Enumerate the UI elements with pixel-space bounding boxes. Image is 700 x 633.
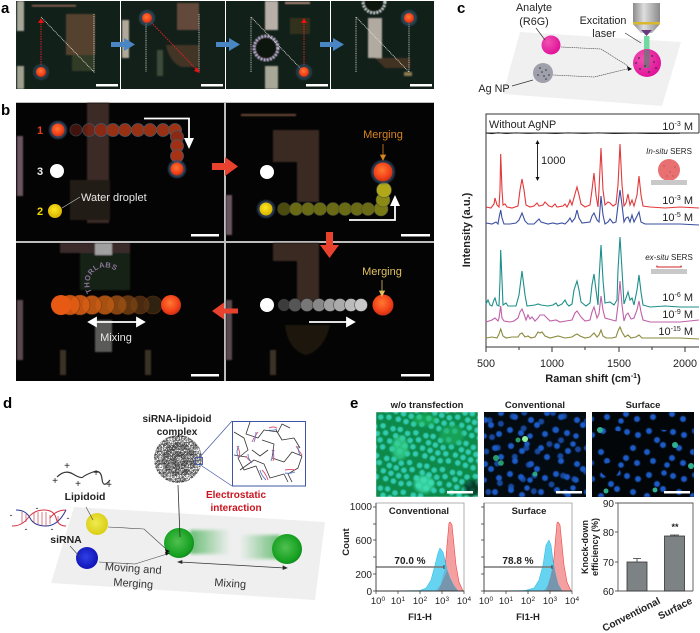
significance: ** <box>671 522 679 532</box>
percent: 78.8 % <box>502 556 534 567</box>
red population <box>544 522 571 591</box>
histogram axes labels: 10 <box>499 596 509 607</box>
y axis title: Intensity (a.u.) <box>461 192 473 267</box>
concentration labels: 10 <box>658 326 671 338</box>
frame 3 <box>226 1 330 89</box>
histogram axes labels: 1000 <box>350 502 372 513</box>
title: Surface <box>512 506 546 517</box>
chart frame <box>486 114 699 352</box>
panel e: microscopy images <box>376 400 694 497</box>
inset: in-situ SERS: In-situ SERS <box>646 147 692 156</box>
label: moving and merging: Moving and <box>104 561 162 577</box>
x tick labels: 2000 <box>673 358 697 370</box>
concentration labels: M <box>681 195 693 207</box>
histogram axes labels: 1 <box>401 596 405 603</box>
red arrow right <box>212 157 238 176</box>
platform <box>503 32 681 106</box>
y ticks: 80 <box>603 528 614 539</box>
label: electrostatic interaction <box>206 490 266 514</box>
histogram: surface <box>484 503 572 591</box>
concentration labels: -5 <box>675 212 681 219</box>
panel c: Raman chart <box>461 114 699 385</box>
lipidoid molecule: + <box>52 476 58 487</box>
histogram axes labels: 1 <box>509 596 513 603</box>
x labels: Surface <box>657 596 695 622</box>
spectrum: without AgNP <box>486 132 680 135</box>
droplet numbers <box>37 125 43 218</box>
engraved ring text: THORLABS <box>84 262 117 294</box>
lipidoid molecule <box>52 461 112 491</box>
blue population <box>376 548 458 591</box>
titles: Surface <box>626 400 660 411</box>
concentration labels: 10 <box>662 121 675 133</box>
y title: efficiency (%) <box>590 518 600 576</box>
droplet: mixture <box>633 49 661 77</box>
siRNA molecule: - <box>36 503 38 513</box>
frame b4 <box>226 243 434 381</box>
histogram axes labels: Fl1-H <box>516 612 540 623</box>
gate <box>376 566 444 568</box>
x axis title: -1 <box>631 373 637 380</box>
histogram axes labels: Count <box>341 527 352 556</box>
y ticks <box>603 499 614 598</box>
direction arrow <box>144 118 194 149</box>
label: merging: Merging <box>363 129 403 141</box>
y ticks: 60 <box>603 587 614 598</box>
panel label b: b <box>1 102 10 119</box>
concentration labels: 10 <box>662 292 675 304</box>
histogram axes labels: 600 <box>355 536 372 547</box>
arrow: a2 <box>216 38 240 51</box>
panel label d: d <box>3 395 12 412</box>
lipidoid molecule: + <box>106 480 112 491</box>
x labels <box>601 596 695 633</box>
siRNA molecule: - <box>50 524 54 534</box>
label: moving and merging: Merging <box>113 577 153 591</box>
label: electrostatic interaction: interaction <box>210 503 262 514</box>
label: mixing: Mixing <box>214 577 246 591</box>
lipidoid molecule: + <box>93 468 99 479</box>
red arrow left <box>212 302 238 320</box>
panel a: image sequence <box>16 0 434 89</box>
label: complex: siRNA-lipidoid <box>143 414 211 425</box>
label: lipidoid: Lipidoid <box>65 491 105 503</box>
spectrum: 1e-9 M <box>486 281 699 322</box>
histogram axes labels: 200 <box>355 570 372 581</box>
concentration labels <box>658 121 693 338</box>
histogram axes labels: 4 <box>575 596 579 603</box>
red arrow down <box>320 232 339 258</box>
panel label a: a <box>1 0 10 17</box>
concentration labels: M <box>681 212 693 224</box>
x tick labels <box>477 358 697 370</box>
inset: in-situ SERS <box>646 147 692 185</box>
panel b: droplet frames <box>16 102 434 381</box>
labels: laser <box>592 28 616 40</box>
frame 4 <box>331 0 434 89</box>
histogram axes labels: 2 <box>423 596 427 603</box>
x tick labels: 1000 <box>540 358 564 370</box>
labels: Excitation <box>580 15 626 27</box>
histogram axes labels: 10 <box>413 596 423 607</box>
concentration labels: -3 <box>675 195 681 202</box>
zoom inset <box>199 421 306 486</box>
label: merging 2: Merging <box>362 266 402 278</box>
y title <box>580 518 600 576</box>
concentration labels: M <box>681 292 693 304</box>
histogram axes labels: 10 <box>371 596 381 607</box>
droplet: siRNA <box>76 547 98 569</box>
image: w/o transfection <box>376 412 480 497</box>
droplet numbers: 3 <box>37 166 43 178</box>
bar: surface <box>664 536 684 591</box>
y ticks: 70 <box>603 558 614 569</box>
histogram axes labels: 10 <box>457 596 467 607</box>
inset: ex-situ SERS: ex-situ SERS <box>645 253 693 262</box>
droplet: merged <box>164 528 194 558</box>
histogram axes labels <box>341 502 579 623</box>
labels: Analyte <box>516 2 552 14</box>
histogram axes labels: 3 <box>553 596 557 603</box>
gate <box>484 566 552 568</box>
frame b2 <box>226 103 434 241</box>
spectrum: 1e-3 M <box>486 144 699 208</box>
x axis title: Raman shift (cm <box>545 373 631 385</box>
scale arrow 1000: 1000 <box>541 155 565 167</box>
histogram axes labels: 10 <box>543 596 553 607</box>
blue population <box>484 540 562 591</box>
histogram axes labels: 10 <box>521 596 531 607</box>
y title: Knock-down <box>580 520 590 574</box>
panel label e: e <box>350 395 358 412</box>
frame b1 <box>16 103 224 241</box>
direction arrow <box>309 318 354 326</box>
label: complex <box>143 414 211 438</box>
frame 2 <box>121 1 225 89</box>
red population <box>436 522 463 591</box>
labels: Ag NP <box>478 83 510 95</box>
concentration labels: 10 <box>662 195 675 207</box>
panel label c: c <box>457 0 465 17</box>
panel c: SERS schematic <box>478 2 681 106</box>
histogram axes labels: 0 <box>489 596 493 603</box>
panel d: siRNA schematic <box>10 414 325 600</box>
concentration labels: -15 <box>671 326 681 333</box>
spectrum: 1e-15 M <box>486 327 699 339</box>
histogram: conventional <box>376 503 464 591</box>
labels <box>478 2 626 95</box>
concentration labels: 10 <box>662 309 675 321</box>
frame b3 <box>16 243 224 381</box>
lipidoid molecule: + <box>64 461 70 472</box>
platform <box>51 507 325 600</box>
concentration labels: -6 <box>675 292 681 299</box>
titles <box>390 400 660 411</box>
histogram axes labels: 10 <box>391 596 401 607</box>
arrow: a1 <box>111 38 135 51</box>
tangled complex <box>144 425 212 493</box>
droplet: mixed <box>272 534 302 564</box>
concentration labels: 10 <box>662 212 675 224</box>
siRNA molecule: - <box>10 510 12 520</box>
siRNA molecule: - <box>66 513 70 523</box>
frame 1 <box>16 1 120 89</box>
concentration labels: M <box>681 121 693 133</box>
droplet numbers: 1 <box>37 125 43 137</box>
bar chart: knock-down efficiency <box>580 499 695 633</box>
concentration labels: -3 <box>675 121 681 128</box>
path arrows <box>553 47 628 77</box>
spectrum: 1e-5 M <box>486 190 699 225</box>
y ticks: 90 <box>603 499 614 510</box>
droplet: Ag NP <box>533 63 553 83</box>
histogram axes labels: 3 <box>445 596 449 603</box>
mixing arrow <box>89 318 144 326</box>
bar: conventional <box>627 562 647 591</box>
header label: Without AgNP <box>489 119 556 131</box>
x tick labels: 500 <box>477 358 495 370</box>
label: mixing: Mixing <box>100 332 132 344</box>
objective lens <box>633 3 660 52</box>
x tick labels: 1500 <box>607 358 631 370</box>
label: siRNA: siRNA <box>50 534 82 546</box>
titles: w/o transfection <box>390 400 464 411</box>
histogram axes labels: 4 <box>467 596 471 603</box>
histogram axes labels: 0 <box>381 596 385 603</box>
inset: ex-situ SERS <box>645 253 693 274</box>
title: Conventional <box>389 506 449 517</box>
histogram axes labels: 10 <box>565 596 575 607</box>
scale arrow 1000 <box>536 140 565 181</box>
histogram axes labels: Fl1-H <box>408 612 432 623</box>
mixing tails <box>190 530 230 554</box>
arrow: a3 <box>320 38 344 51</box>
siRNA molecule: - <box>24 524 28 534</box>
histogram axes labels: 10 <box>435 596 445 607</box>
histogram axes labels: 2 <box>531 596 535 603</box>
connectors <box>70 507 167 564</box>
image: conventional <box>484 412 586 497</box>
x axis title: ) <box>637 373 641 385</box>
histogram axes labels: 10 <box>479 596 489 607</box>
label: electrostatic interaction: Electrostatic <box>206 490 266 501</box>
titles: Conventional <box>505 400 565 411</box>
image: surface <box>592 412 694 497</box>
percent: 70.0 % <box>394 556 426 567</box>
concentration labels: M <box>681 309 693 321</box>
concentration labels: M <box>681 326 693 338</box>
labels: (R6G) <box>519 16 549 28</box>
direction arrow <box>349 195 400 220</box>
droplet numbers: 2 <box>37 206 43 218</box>
label: moving and merging <box>104 561 162 591</box>
lipidoid molecule: + <box>75 479 81 490</box>
spectrum: 1e-6 M <box>486 237 699 307</box>
concentration labels: -9 <box>675 309 681 316</box>
siRNA molecule <box>10 503 70 534</box>
droplet: analyte <box>542 36 560 54</box>
histogram axes labels: 0 <box>366 587 372 598</box>
droplet: lipidoid <box>86 513 108 535</box>
label: water droplet: Water droplet <box>81 192 147 204</box>
label: complex: complex <box>157 427 198 438</box>
